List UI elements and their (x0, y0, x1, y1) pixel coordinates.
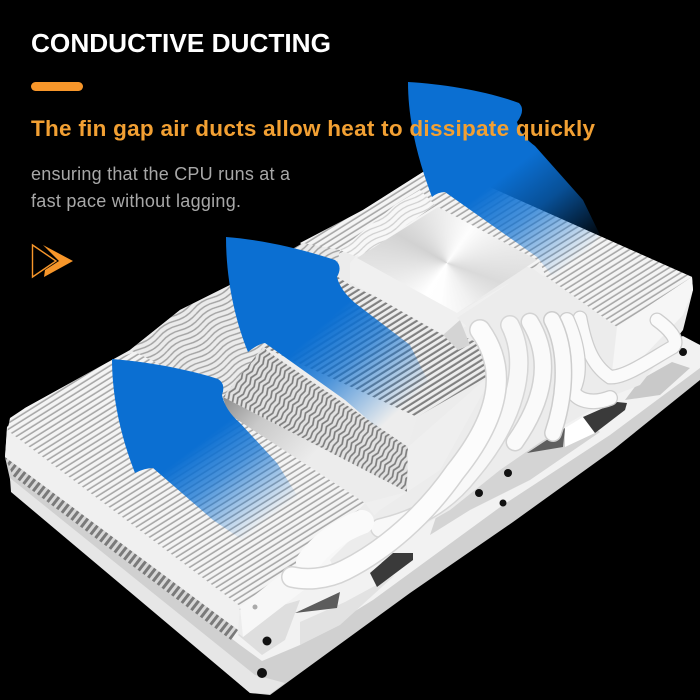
pipe B (380, 325, 519, 528)
lower dark blade (370, 553, 413, 587)
white block side (365, 375, 490, 520)
gray fan blade (527, 428, 565, 453)
body text (31, 164, 291, 211)
upper fan frame (12, 336, 700, 661)
pipe stub (308, 522, 362, 562)
cooler: bottom fan and frame (5, 336, 700, 695)
mounting holes (257, 348, 687, 678)
cold plate (350, 200, 545, 350)
gray frame section (430, 420, 600, 535)
front grate (5, 457, 238, 640)
body text: ensuring that the CPU runs at a (31, 164, 291, 184)
title: CONDUCTIVE DUCTING (31, 28, 331, 58)
brushed disc top (358, 208, 536, 312)
dark fan blade (583, 402, 627, 433)
pipe A (292, 330, 496, 579)
pipe E (567, 320, 610, 401)
lower gray blade (295, 592, 340, 613)
front white strip (5, 430, 240, 630)
body text: fast pace without lagging. (31, 191, 241, 211)
white band (263, 347, 417, 447)
gray ridge (223, 397, 407, 503)
arrow 2 (226, 237, 430, 430)
orange accent bar (31, 82, 83, 91)
lower lip (10, 478, 285, 694)
upper wavy fins (130, 243, 340, 397)
end plate (240, 518, 372, 637)
pipe C (515, 322, 543, 442)
arrow 1 (112, 359, 300, 545)
pipe D (552, 320, 563, 433)
subtitle: The fin gap air ducts allow heat to dissipate quickly (31, 116, 595, 141)
white fan blade (565, 417, 595, 447)
right block side (612, 277, 693, 372)
heatsink underlay (5, 165, 693, 637)
pipe mass (330, 268, 612, 580)
bottom fan plate (5, 338, 700, 695)
base plate (350, 255, 545, 335)
rear fins (300, 165, 692, 327)
front flat fins (7, 352, 365, 610)
middle flat fins (263, 275, 490, 417)
heat pipes (292, 268, 675, 580)
fin stack (5, 165, 693, 640)
arrow 3 (408, 82, 600, 285)
side wall fins (223, 347, 408, 492)
pipe F (580, 318, 675, 377)
ripple by plate (340, 190, 435, 258)
icon: double play arrow (32, 245, 73, 277)
